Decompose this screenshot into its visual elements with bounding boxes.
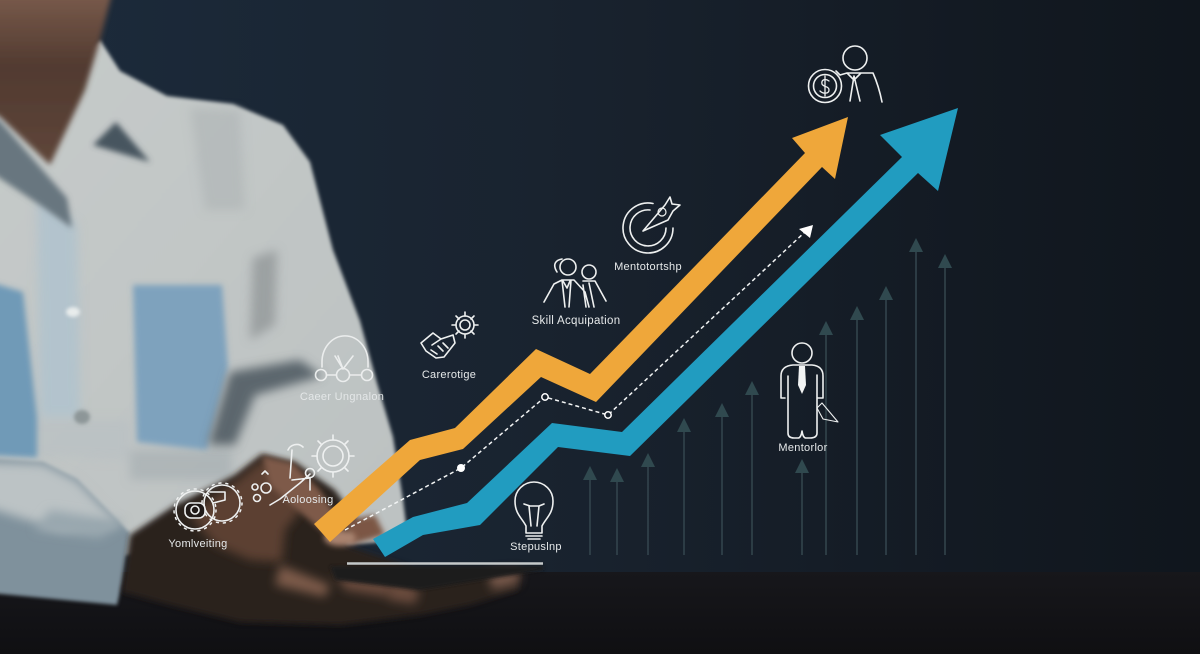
- icon: person with dollar target: [808, 46, 882, 102]
- icon and label: Automation gears: [252, 435, 354, 506]
- finger under the arrows: [345, 515, 385, 545]
- icon and label: Yomiveiting gears: [168, 483, 242, 550]
- lower fingers: [275, 565, 520, 604]
- back of hand: [190, 460, 305, 562]
- blue growth arrow: [373, 108, 958, 557]
- icon and label: Automation gears: Aoloosing: [282, 494, 334, 506]
- icon and label: Mentorship target: Mentotortshp: [614, 261, 682, 273]
- icon and label: Skill Acquisition: [532, 259, 620, 327]
- icon and label: Career handshake gear: [421, 312, 478, 381]
- shirt buttons: [66, 307, 90, 424]
- icon and label: Yomiveiting gears: Yomlveiting: [168, 538, 228, 550]
- dotted white trend arrow: [345, 225, 813, 530]
- icon and label: Career Upgrade arc: Caeer Ungnalon: [300, 391, 384, 403]
- palm base: [122, 454, 520, 625]
- icon and label: Career Upgrade arc: [300, 336, 384, 403]
- icon and label: Mentor figure: Mentorlor: [778, 442, 828, 454]
- icon and label: Mentorship target: [614, 197, 682, 273]
- icon and label: Stepuslnp light bulb: [510, 482, 562, 553]
- hand holding phone: [122, 454, 520, 625]
- thin background arrows: [583, 238, 952, 555]
- phone: [330, 564, 543, 590]
- icon and label: Mentor figure: [778, 343, 838, 454]
- icon and label: Stepuslnp light bulb: Stepuslnp: [510, 541, 562, 553]
- blue panel left: [0, 279, 37, 458]
- skin: neck and chin: [0, 0, 118, 165]
- finger tip: [324, 530, 356, 546]
- shirt body: [0, 40, 408, 555]
- index finger: [262, 456, 345, 540]
- icon and label: Skill Acquisition: Skill Acquipation: [532, 315, 620, 327]
- shirt collar: [0, 112, 150, 228]
- table surface: [0, 572, 1200, 654]
- sleeve and cuff: [0, 458, 130, 605]
- blue pocket right: [133, 285, 228, 450]
- sleeve fold shadow: [208, 360, 322, 445]
- photo: person in shirt: [0, 0, 958, 625]
- shirt shading: [0, 108, 277, 480]
- orange growth arrow: [314, 117, 848, 542]
- icon and label: Career handshake gear: Carerotige: [422, 369, 476, 381]
